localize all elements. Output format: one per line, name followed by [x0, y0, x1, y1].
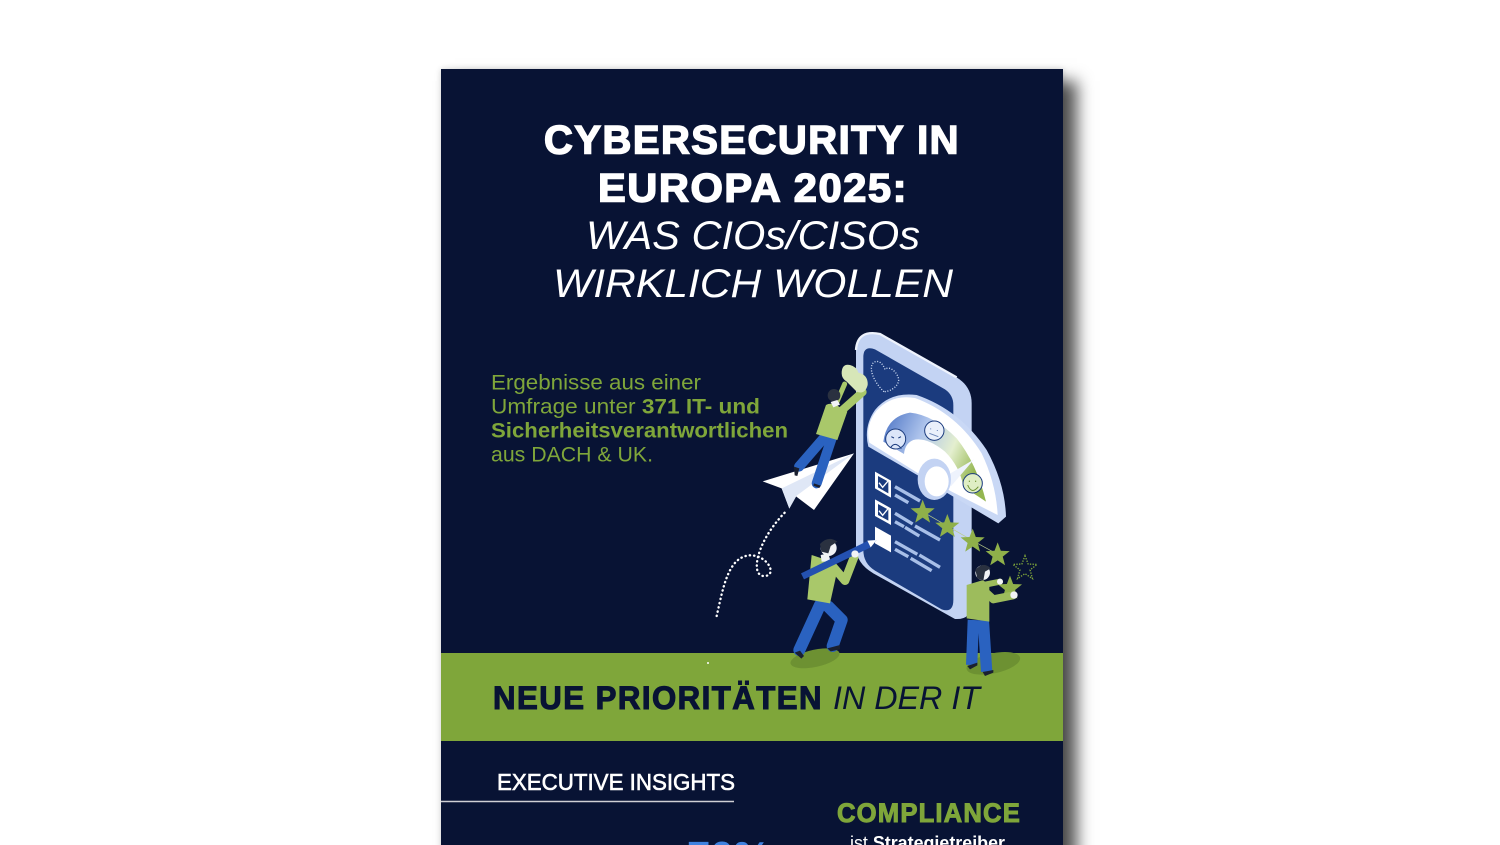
- intro text: Sicherheitsverantwortlichen: [491, 420, 788, 442]
- executive insights heading: EXECUTIVE INSIGHTS: [497, 769, 735, 795]
- poster sheet with drop shadow: [441, 69, 1063, 845]
- intro text: Ergebnisse aus einer: [491, 372, 701, 394]
- phone body: [856, 333, 972, 619]
- paper plane: [763, 453, 854, 510]
- heart outline: [871, 361, 899, 392]
- gauge needle: [945, 459, 974, 487]
- person with pencil: [795, 539, 877, 659]
- illustration: phone with people: [717, 333, 1037, 679]
- intro text: aus DACH & UK.: [491, 444, 653, 466]
- person on plane: [794, 365, 868, 488]
- checklist: [875, 472, 940, 571]
- title: CYBERSECURITY IN: [544, 118, 960, 162]
- dotted flight path: [717, 510, 787, 616]
- person with star: [967, 565, 1018, 676]
- green banner: [441, 653, 1063, 741]
- compliance callout: COMPLIANCE: [837, 798, 1021, 828]
- gauge: [867, 394, 1006, 523]
- rating stars: [911, 500, 1037, 599]
- gauge faces: [886, 421, 982, 493]
- title: WIRKLICH WOLLEN: [553, 262, 953, 306]
- banner heading: IN DER IT: [833, 680, 982, 716]
- intro text: [491, 372, 788, 466]
- ground shadows: [789, 645, 1022, 679]
- title: EUROPA 2025:: [598, 166, 908, 210]
- banner heading: [493, 680, 982, 716]
- compliance callout: [837, 798, 1021, 845]
- title: [544, 118, 960, 306]
- intro text: Umfrage unter 371 IT- und: [491, 396, 760, 418]
- title: WAS CIOs/CISOs: [586, 214, 920, 258]
- banner heading: NEUE PRIORITÄTEN: [493, 680, 823, 716]
